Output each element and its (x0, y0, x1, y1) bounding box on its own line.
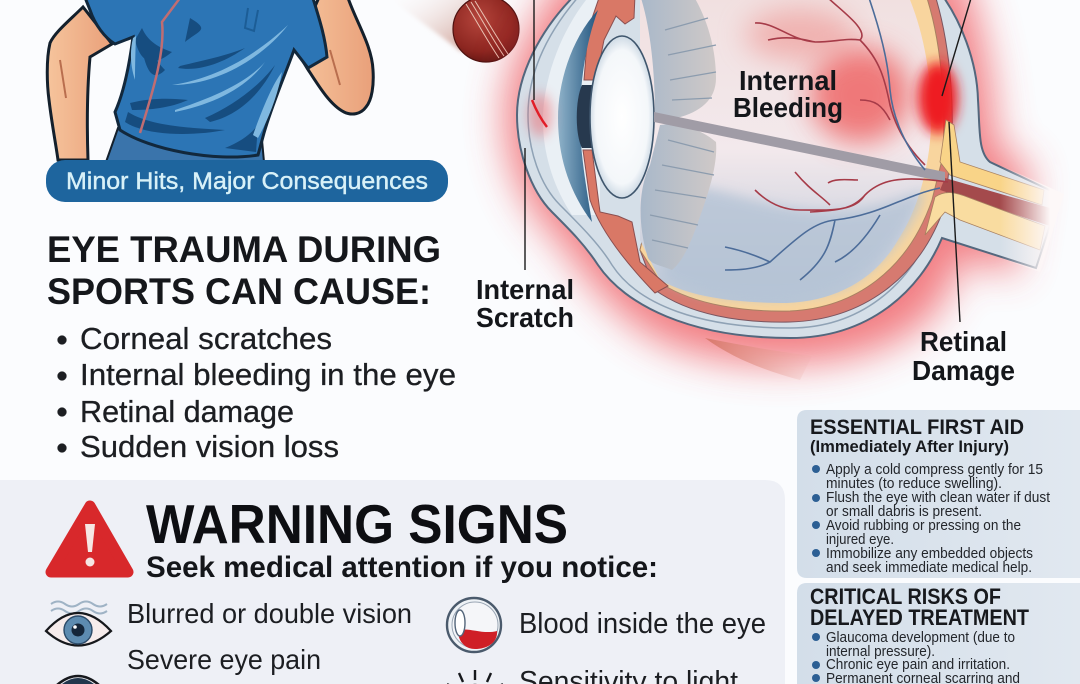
inner sclera line (528, 0, 932, 328)
right arm (296, 0, 373, 114)
banner: Minor Hits, Major Consequences: Minor Hits, Major Consequences (66, 168, 428, 195)
label: retinal damage: Retinal (920, 326, 1007, 357)
heading: warning signs: WARNING SIGNS (146, 493, 568, 555)
icon: warning triangle (51, 506, 128, 572)
panel: essential first aid (797, 410, 1080, 578)
list: effects of eye trauma: Sudden vision loss (80, 429, 339, 464)
shirt seam (140, 0, 180, 133)
panel: warning signs (0, 480, 785, 684)
optic nerve lower (925, 193, 1045, 250)
sclera (517, 0, 1060, 338)
heading: critical risks (810, 584, 1029, 630)
ciliary body upper (640, 0, 716, 118)
list: effects of eye trauma: Retinal damage (80, 394, 294, 429)
list: risks: Chronic eye pain and irritation. (826, 657, 1010, 673)
list: first aid steps: Flush the eye with clean water if dust (826, 490, 1050, 506)
optic rod (654, 112, 945, 182)
label: internal scratch: Scratch (476, 302, 574, 333)
retina band (640, 0, 944, 311)
label: internal scratch: Internal (476, 274, 574, 305)
list: risks (812, 630, 1020, 684)
list: first aid steps (812, 462, 1050, 576)
heading: eye trauma during sports (47, 229, 441, 312)
scratch mark (532, 100, 547, 127)
list: risks: Glaucoma development (due to (826, 630, 1015, 646)
iris (558, 10, 598, 222)
heading: critical risks: CRITICAL RISKS OF (810, 584, 1001, 609)
list: first aid steps: injured eye. (826, 532, 894, 548)
ciliary body lower (641, 124, 716, 270)
illustration: player torso (47, 0, 373, 162)
eye anatomy diagram (476, 0, 1064, 386)
heading: eye trauma during sports: EYE TRAUMA DURING (47, 229, 441, 270)
forearm shading (60, 50, 340, 98)
lower cavity shading (660, 186, 925, 299)
choroid band (640, 0, 952, 322)
list: effects of eye trauma (58, 321, 456, 464)
list: first aid steps: or small dabris is present. (826, 504, 982, 520)
label: internal bleeding (733, 65, 843, 123)
leader line: internal scratch (524, 148, 526, 270)
label: internal scratch (476, 274, 574, 333)
leader line: retina top (942, 0, 972, 96)
vitreous cavity (640, 0, 931, 303)
label: internal bleeding: Bleeding (733, 92, 843, 123)
hemorrhage patches (810, 47, 910, 143)
lower muscle (705, 338, 812, 380)
text: blurred or double vision: Blurred or double vision (127, 598, 412, 629)
heading: eye trauma during sports: SPORTS CAN CAUSE: (47, 271, 431, 312)
heading: essential first aid: ESSENTIAL FIRST AID (810, 416, 1024, 439)
list: first aid steps: Immobilize any embedded objects (826, 546, 1033, 562)
list: first aid steps: minutes (to reduce swelling). (826, 476, 1002, 492)
text: blood inside the eye: Blood inside the eye (519, 608, 766, 640)
list: risks: internal pressure). (826, 644, 935, 660)
icon: light sensitivity (447, 670, 503, 684)
pocket (245, 8, 258, 31)
icon: blood in eye (447, 598, 501, 652)
cricket ball with motion trail (385, 0, 519, 62)
scratch glow (528, 93, 552, 137)
text: severe eye pain: Severe eye pain (127, 644, 321, 675)
shirt folds (125, 18, 275, 152)
red glow (505, 0, 1030, 364)
subheading: Seek medical attention if you notice: (146, 551, 658, 584)
optic nerve vessels (940, 178, 1050, 226)
left arm (47, 7, 112, 160)
subheading: immediately after injury: (Immediately After Injury) (810, 437, 1009, 456)
panel: critical risks of delayed treatment (797, 583, 1080, 684)
anterior chamber (543, 0, 600, 215)
ciliary folds (650, 18, 716, 248)
leader line: scratch upper (533, 0, 535, 100)
heading: critical risks: DELAYED TREATMENT (810, 605, 1029, 630)
icon: blurred vision eye (46, 602, 111, 646)
label: retinal damage (912, 326, 1015, 386)
label: retinal damage: Damage (912, 355, 1015, 386)
icon: eye pain (50, 676, 106, 684)
shirt highlights (131, 25, 288, 138)
ciliary muscle upper (584, 0, 635, 80)
shirt (84, 0, 327, 157)
blue veins (725, 0, 940, 280)
list: first aid steps: and seek immediate medical help. (826, 560, 1032, 576)
list: effects of eye trauma: Internal bleeding in the eye (80, 357, 456, 392)
optic nerve fade (1000, 165, 1064, 272)
optic nerve upper (940, 120, 1044, 205)
list: first aid steps: Avoid rubbing or pressing on the (826, 518, 1021, 534)
lens (590, 36, 654, 198)
label: internal bleeding: Internal (739, 65, 837, 96)
shorts (106, 128, 264, 162)
list: first aid steps: Apply a cold compress gently for 15 (826, 462, 1043, 478)
banner: Minor Hits, Major Consequences (46, 160, 448, 202)
pupil (577, 85, 592, 148)
red arteries (755, 0, 948, 212)
list: effects of eye trauma: Corneal scratches (80, 321, 332, 356)
leader line: retinal damage (949, 122, 960, 322)
ciliary muscle lower (583, 150, 668, 293)
